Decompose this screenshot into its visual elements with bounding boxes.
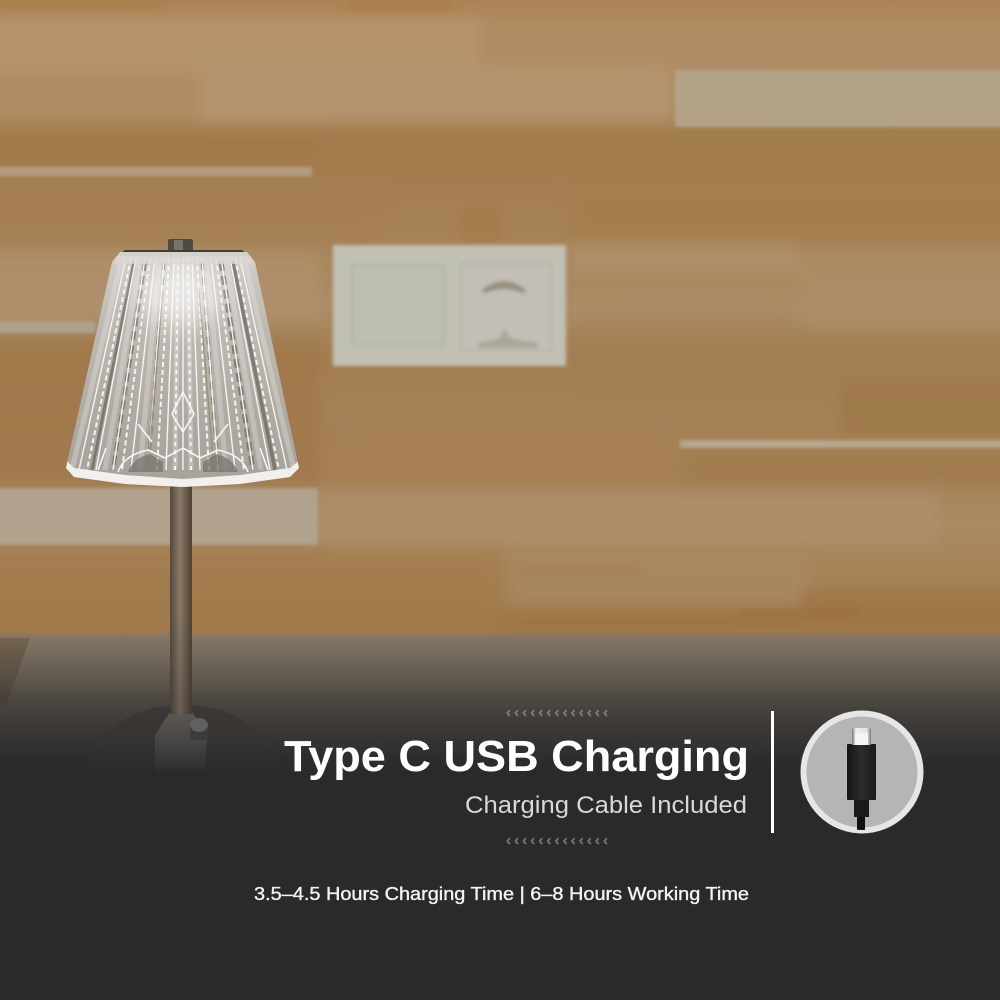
lit glow top [138, 265, 222, 325]
socket [461, 264, 551, 350]
wall switch and socket plate [333, 245, 566, 366]
vertical divider [771, 711, 774, 833]
switch rocker [352, 265, 444, 345]
title: Type C USB Charging [284, 732, 749, 781]
subtitle: Charging Cable Included [465, 792, 747, 819]
decorative chevrons top: ‹‹‹‹‹‹‹‹‹‹‹‹‹ [506, 704, 608, 721]
lamp top knob [120, 239, 247, 254]
bright bottom rim [66, 462, 299, 487]
dark rim arches [128, 454, 238, 472]
table lamp [60, 239, 305, 772]
icon: USB-C cable [804, 714, 920, 835]
charging and working time line: 3.5–4.5 Hours Charging Time | 6–8 Hours Working Time [254, 884, 749, 904]
warm inner lines [148, 290, 214, 470]
lamp base [84, 705, 282, 772]
wood knots and grain [0, 0, 860, 617]
bright glass flutes [79, 258, 287, 470]
bright top rim [114, 256, 252, 264]
wide soft flutes [72, 258, 294, 470]
decorative chevrons bottom: ‹‹‹‹‹‹‹‹‹‹‹‹‹ [506, 832, 608, 849]
dark glass facets [92, 262, 275, 470]
chevrons and arches near the rim [98, 392, 268, 472]
lamp stem [170, 486, 192, 714]
dark gradient overlay [0, 632, 1000, 775]
table surface [0, 634, 1000, 804]
wood wall background [0, 0, 1000, 640]
crystal lamp shade [60, 250, 305, 490]
